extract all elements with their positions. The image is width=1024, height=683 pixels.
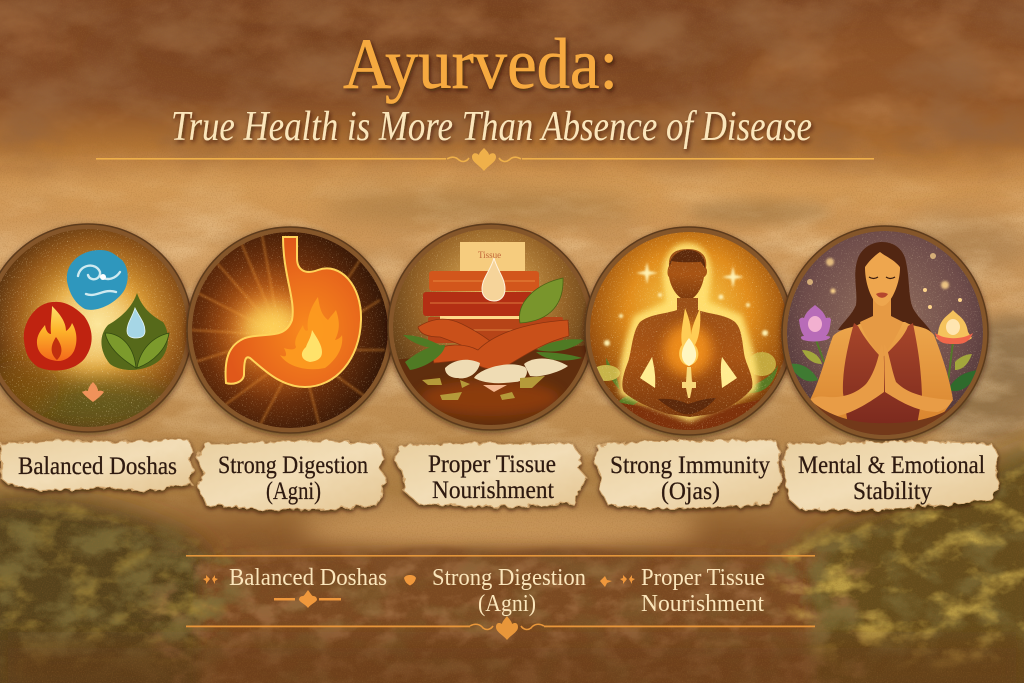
label: proper tissue nourishment: Proper Tissue	[428, 451, 556, 478]
icon: inner flame	[664, 308, 712, 398]
footer summary: balanced doshas	[203, 565, 387, 608]
parchment note	[460, 242, 525, 272]
icon: oil drop	[482, 258, 505, 301]
footer summary: strong digestion: Strong Digestion	[432, 565, 586, 591]
parchment note: Tissue	[478, 250, 501, 260]
label: strong digestion: Strong Digestion	[218, 452, 368, 479]
footer bullet	[600, 575, 635, 587]
icon: intertwined roots	[418, 319, 569, 369]
label: mental and emotional stability	[783, 441, 999, 510]
icon: stomach	[226, 237, 361, 387]
footer summary: proper tissue nourishment: Proper Tissue	[641, 565, 765, 591]
label: proper tissue nourishment: Nourishment	[432, 477, 554, 504]
sun rays	[190, 235, 385, 428]
footer top rule	[186, 555, 815, 557]
soil	[398, 346, 586, 425]
meditating woman	[806, 242, 960, 440]
footer summary: strong digestion: (Agni)	[478, 591, 536, 617]
stacked tissue layers	[423, 271, 563, 343]
meditating figure	[622, 249, 752, 417]
foliage	[606, 358, 778, 406]
left lotus	[789, 305, 831, 381]
label: strong immunity	[595, 440, 782, 509]
label: mental and emotional stability: Mental & Emotional	[798, 452, 985, 479]
label: balanced doshas: Balanced Doshas	[18, 453, 177, 480]
label: proper tissue nourishment	[396, 443, 587, 507]
stars	[807, 253, 962, 309]
label: balanced doshas	[0, 440, 194, 491]
panel: mental and emotional stability medallion	[782, 226, 988, 440]
bottom base tones	[0, 497, 222, 683]
foliage	[403, 335, 584, 370]
subtitle: True Health is More Than Absence of Disease	[171, 104, 812, 150]
icon: air element	[67, 250, 128, 310]
title: Ayurveda:	[343, 24, 618, 104]
root nodules	[445, 358, 568, 383]
label: strong immunity: (Ojas)	[661, 478, 720, 505]
icon: small lotus	[82, 382, 104, 402]
sparkles	[604, 262, 768, 346]
footer summary: proper tissue nourishment: Nourishment	[641, 591, 764, 617]
panel: proper tissue nourishment medallion	[388, 224, 594, 430]
icon: leaf	[519, 278, 563, 323]
glow around figure	[619, 243, 758, 422]
label: mental and emotional stability: Stability	[853, 478, 932, 505]
icon: fire element	[24, 302, 92, 370]
panel: strong immunity medallion	[585, 227, 793, 440]
footer bullet	[404, 575, 416, 586]
footer bottom rule with ornament	[186, 616, 815, 640]
panel: balanced doshas medallion	[0, 224, 192, 432]
panel: strong digestion medallion	[187, 227, 393, 433]
icon: water and earth element	[101, 293, 169, 370]
right lotus	[935, 310, 978, 391]
label: strong digestion: (Agni)	[266, 478, 321, 505]
label: strong digestion	[197, 441, 386, 510]
footer summary: proper tissue nourishment	[641, 565, 765, 617]
label: strong immunity: Strong Immunity	[610, 452, 770, 479]
header divider with ornament	[96, 148, 874, 171]
footer summary: balanced doshas: Balanced Doshas	[229, 565, 387, 591]
ground	[620, 400, 760, 430]
footer summary: strong digestion	[432, 565, 586, 617]
